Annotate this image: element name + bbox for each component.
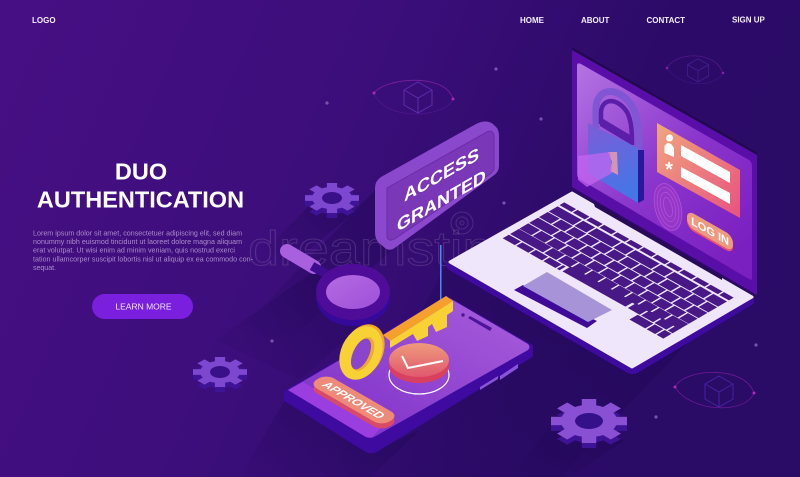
hinge xyxy=(593,201,722,280)
orbit cube: top right xyxy=(666,56,724,84)
body text xyxy=(33,230,254,272)
body text: erat volutpat. Ut wisi enim ad minim veniam, quis nostrud exerci xyxy=(33,247,235,255)
laptop xyxy=(448,47,757,373)
title xyxy=(37,158,244,212)
floating dots xyxy=(270,67,758,419)
padlock xyxy=(578,92,644,203)
body text: nonummy nibh euismod tincidunt ut laoreet dolore magna aliquam xyxy=(33,238,242,246)
laptop screen xyxy=(572,47,757,295)
gear: lower left xyxy=(193,357,247,392)
orbit cube: top centre xyxy=(372,80,454,114)
pill: approved xyxy=(309,374,399,431)
golden key xyxy=(331,296,453,387)
body text: Lorem ipsum dolor sit amet, consectetuer adipiscing elit, sed diam xyxy=(33,230,242,238)
speaker xyxy=(461,313,492,331)
laptop base edge xyxy=(448,262,753,373)
phone chin xyxy=(288,382,381,437)
watermark: dreamstime xyxy=(248,223,540,276)
button: learn more xyxy=(92,294,193,319)
navigation bar: CONTACT xyxy=(646,16,685,25)
title: DUO xyxy=(115,158,167,184)
magnifying glass xyxy=(287,251,390,326)
gear: bottom xyxy=(551,399,627,448)
phone screen xyxy=(288,298,530,438)
navigation bar: SIGN UP xyxy=(732,16,766,24)
navigation bar: HOME xyxy=(520,16,545,25)
gear: top xyxy=(305,183,359,218)
keyboard deck xyxy=(450,193,752,367)
long shadows xyxy=(215,190,700,477)
keys xyxy=(498,204,731,336)
beam from sign to key xyxy=(440,245,442,300)
login panel xyxy=(657,123,740,218)
button: learn more: LEARN MORE xyxy=(115,302,172,312)
confirmation button xyxy=(389,343,449,394)
touchpad xyxy=(514,272,612,328)
navigation bar: LOGO xyxy=(32,16,56,25)
pill: log in xyxy=(687,210,733,254)
pill: approved: APPROVED xyxy=(318,380,389,421)
phone body xyxy=(285,297,532,452)
body text: tation ullamcorper suscipit lobortis nisl ut aliquip ex ea commodo con- xyxy=(33,255,254,263)
sign: access granted xyxy=(375,122,499,250)
sign: access granted: GRANTED xyxy=(397,166,486,237)
body text: sequat. xyxy=(33,264,56,272)
fingerprint xyxy=(650,181,686,233)
phone xyxy=(285,297,532,452)
orbit cube: bottom right xyxy=(674,372,756,408)
title: AUTHENTICATION xyxy=(37,186,244,212)
navigation bar: ABOUT xyxy=(581,16,610,25)
sign: access granted: ACCESS xyxy=(404,143,479,207)
navigation bar xyxy=(32,16,766,25)
login panel: * xyxy=(665,159,673,181)
side buttons xyxy=(480,364,518,390)
pill: log in: LOG IN xyxy=(691,214,729,249)
